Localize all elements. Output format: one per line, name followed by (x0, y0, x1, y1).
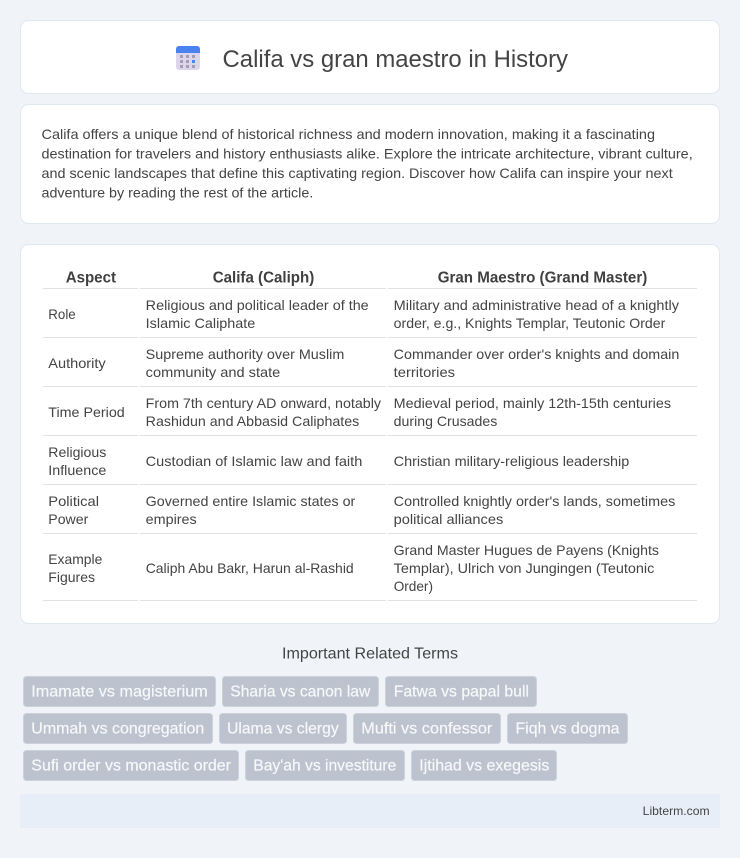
table row: example figures: Example (48, 551, 103, 567)
text block: introduction: Califa offers a unique blend of historical richness and modern innovation, making it a fascinating (42, 126, 655, 142)
table row: role: Military and administrative head of a knightly (394, 297, 679, 313)
table row: role: Islamic Caliphate (146, 315, 256, 331)
table header row: Califa (Caliph) (213, 270, 314, 286)
tag (246, 750, 404, 780)
panel: introduction (20, 104, 720, 224)
table row: political power: Controlled knightly order's lands, sometimes (394, 493, 675, 509)
table row: header rule (43, 288, 697, 289)
table header row (66, 270, 647, 286)
table row: religious influence (43, 444, 697, 485)
table header row: Aspect (66, 270, 117, 286)
tag (220, 714, 346, 744)
table row: authority: Authority (48, 355, 106, 371)
table row: example figures: Grand Master Hugues de Payens (Knights (394, 542, 659, 558)
table row: example figures: Templar), Ulrich von Jungingen (Teutonic (394, 560, 654, 576)
heading: important related terms: Important Related Terms (282, 646, 458, 662)
related term tags (24, 676, 628, 780)
table row: political power: Governed entire Islamic states or (146, 493, 356, 509)
tag: Mufti vs confessor (361, 721, 493, 738)
tag: Ulama vs clergy (227, 721, 339, 738)
footer bar (20, 794, 720, 828)
tag: Fatwa vs papal bull (394, 684, 529, 701)
text block: introduction: and scenic landscapes that define this captivating region. Discover how Califa can inspire your next (42, 165, 673, 181)
tag (386, 676, 536, 706)
table row: political power: Political (48, 493, 99, 509)
tag (354, 714, 500, 744)
table row: authority: community and state (146, 364, 281, 380)
table row: time period: Time Period (48, 404, 125, 420)
table row: political power: empires (146, 511, 197, 527)
table row: authority (43, 346, 697, 387)
tag: Ijtihad vs exegesis (419, 758, 549, 775)
table row: time period (43, 395, 697, 436)
tag (222, 676, 378, 706)
table row: religious influence: Custodian of Islamic law and faith (146, 453, 362, 469)
table row: role: Religious and political leader of the (146, 297, 369, 313)
table row: authority: Commander over order's knights and domain (394, 346, 679, 362)
table row: role (43, 297, 697, 338)
table row: example figures: Caliph Abu Bakr, Harun al-Rashid (146, 560, 354, 576)
table row: role: order, e.g., Knights Templar, Teutonic Order (394, 315, 666, 331)
tag (24, 714, 212, 744)
text block: introduction (42, 126, 693, 201)
tag: Imamate vs magisterium (31, 684, 208, 701)
table row: religious influence: Religious (48, 444, 106, 460)
table row: religious influence: Christian military-religious leadership (394, 453, 630, 469)
table row: time period: Medieval period, mainly 12th-15th centuries (394, 395, 671, 411)
table row: political power: political alliances (394, 511, 503, 527)
title: Califa vs gran maestro in History (222, 46, 568, 73)
tag: Sharia vs canon law (230, 684, 371, 701)
table row: time period: From 7th century AD onward, notably (146, 395, 381, 411)
table row: religious influence: Influence (48, 462, 107, 478)
panel: comparison table (20, 244, 720, 624)
panel: header (20, 20, 720, 94)
tag (24, 750, 238, 780)
tag: Sufi order vs monastic order (31, 758, 232, 775)
icon: calendar (176, 46, 200, 70)
table row: example figures: Order) (394, 578, 433, 594)
table header row: Gran Maestro (Grand Master) (438, 270, 647, 286)
tag (508, 714, 628, 744)
table row: political power (43, 493, 697, 534)
table row: time period: during Crusades (394, 413, 497, 429)
table row: role: Role (48, 306, 76, 322)
tag (412, 750, 556, 780)
table row: political power: Power (48, 511, 89, 527)
tag: Bay'ah vs investiture (253, 758, 396, 775)
table row: authority: Supreme authority over Muslim (146, 346, 344, 362)
table row: example figures: Figures (48, 569, 95, 585)
tag: Fiqh vs dogma (516, 721, 620, 738)
footer credit: Libterm.com (643, 804, 710, 818)
tag (24, 676, 216, 706)
table row: example figures (43, 542, 697, 601)
table row: authority: territories (394, 364, 455, 380)
table row: time period: Rashidun and Abbasid Caliphates (146, 413, 359, 429)
text block: introduction: destination for travelers and history enthusiasts alike. Explore the intricate architecture, vibrant culture, (42, 146, 693, 162)
tag: Ummah vs congregation (31, 721, 204, 738)
text block: introduction: adventure by reading the rest of the article. (42, 185, 313, 201)
